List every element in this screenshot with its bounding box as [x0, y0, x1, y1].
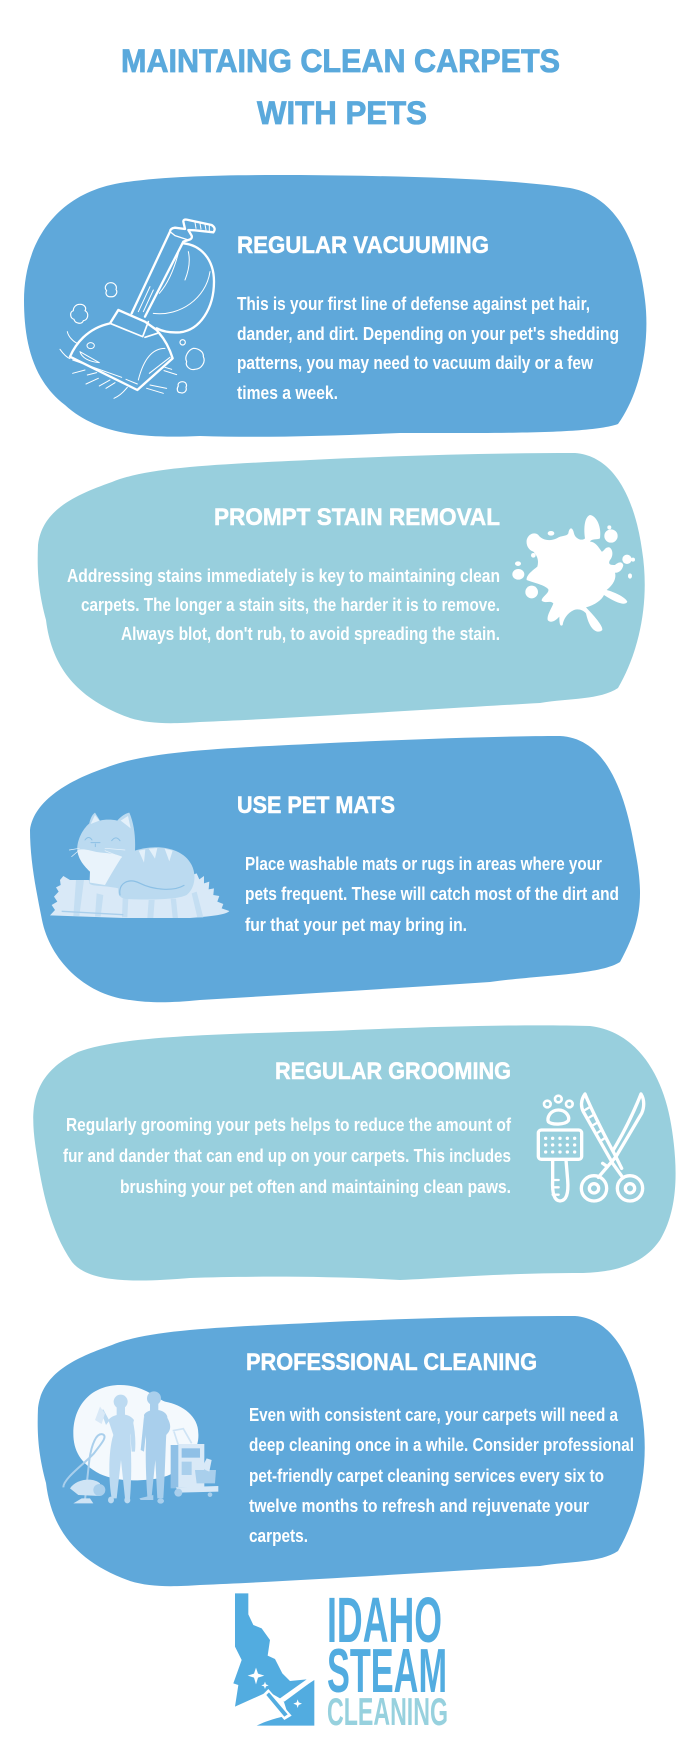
text: regular grooming body: Regularly grooming your pets helps to reduce the amount of — [66, 1115, 512, 1135]
paw — [548, 1110, 569, 1124]
text: prompt stain removal body: carpets. The longer a stain sits, the harder it is to remove. — [81, 595, 500, 615]
text: professional cleaning body — [249, 1405, 634, 1546]
heading: prompt stain removal: PROMPT STAIN REMOVAL — [214, 504, 500, 531]
scissors — [581, 1094, 623, 1177]
logo text: IDAHO — [327, 1584, 442, 1656]
panel: regular grooming — [33, 1025, 676, 1281]
text: regular vacuuming body: dander, and dirt. Depending on your pet's shedding — [237, 324, 619, 344]
icon: stain splatter — [512, 515, 635, 632]
text: regular vacuuming body: This is your first line of defense against pet hair, — [237, 294, 590, 314]
panel background: prompt stain removal — [38, 453, 645, 723]
cat chest — [77, 849, 122, 885]
title: MAINTAING CLEAN CARPETS — [121, 43, 560, 79]
woman — [95, 1395, 135, 1503]
text: regular grooming body: brushing your pet often and maintaining clean paws. — [120, 1177, 511, 1197]
panel background: regular vacuuming — [24, 175, 646, 437]
logo: Idaho Steam Cleaning: CLEANING — [327, 1691, 448, 1734]
text: use pet mats body — [245, 854, 619, 935]
vacuum head — [60, 283, 204, 398]
vacuum machine — [63, 1434, 105, 1503]
panel: prompt stain removal — [38, 453, 645, 723]
icon: grooming tools — [538, 1094, 644, 1201]
text: use pet mats body: Place washable mats or rugs in areas where your — [245, 854, 602, 874]
logo: Idaho Steam Cleaning: STEAM — [327, 1637, 447, 1706]
cat face — [85, 837, 120, 847]
title: WITH PETS — [257, 95, 427, 131]
backdrop blob — [73, 1385, 198, 1480]
vacuum upper: handle and bag — [132, 220, 215, 332]
rug — [50, 873, 229, 918]
text: regular vacuuming body: times a week. — [237, 383, 338, 403]
logo: Idaho Steam Cleaning — [233, 1584, 448, 1734]
heading: regular vacuuming: REGULAR VACUUMING — [237, 232, 489, 259]
heading: professional cleaning: PROFESSIONAL CLEANING — [246, 1349, 537, 1376]
text: use pet mats body: fur that your pet may bring in. — [245, 915, 467, 935]
brush — [538, 1130, 582, 1159]
text: use pet mats body: pets frequent. These will catch most of the dirt and — [245, 884, 619, 904]
text: regular grooming body: fur and dander that can end up on your carpets. This includes — [63, 1146, 511, 1166]
panel background: professional cleaning — [38, 1316, 645, 1586]
text: prompt stain removal body: Addressing stains immediately is key to maintaining clean — [67, 566, 500, 586]
cat ears — [91, 815, 131, 828]
cat stripes — [139, 848, 173, 863]
icon: Idaho state with squeegee — [233, 1593, 314, 1726]
title — [121, 43, 560, 131]
text: professional cleaning body: twelve months to refresh and rejuvenate your — [249, 1496, 589, 1516]
text: professional cleaning body: pet-friendly carpet cleaning services every six to — [249, 1466, 604, 1486]
text: professional cleaning body: deep cleaning once in a while. Consider professional — [249, 1435, 634, 1455]
cat body — [77, 813, 194, 900]
heading: use pet mats: USE PET MATS — [237, 792, 395, 819]
heading: regular grooming: REGULAR GROOMING — [275, 1058, 511, 1085]
text: regular vacuuming body: patterns, you may need to vacuum daily or a few — [237, 353, 594, 373]
text: professional cleaning body: carpets. — [249, 1526, 308, 1546]
text: prompt stain removal body: Always blot, don't rub, to avoid spreading the stain. — [121, 624, 500, 644]
man — [139, 1391, 170, 1504]
text: regular vacuuming body — [237, 294, 619, 403]
text: regular grooming body — [63, 1115, 512, 1197]
icon: vacuum cleaner — [60, 220, 215, 398]
panel: professional cleaning — [38, 1316, 645, 1586]
panel: regular vacuuming — [24, 175, 646, 437]
panel background: use pet mats — [30, 736, 640, 1002]
panel background: regular grooming — [33, 1025, 676, 1281]
icon: cat on rug — [50, 813, 229, 918]
cleaning cart — [171, 1429, 218, 1497]
text: professional cleaning body: Even with consistent care, your carpets will need a — [249, 1405, 619, 1425]
text: prompt stain removal body — [67, 566, 500, 644]
illustration: cleaning team — [63, 1385, 218, 1504]
panel: use pet mats — [30, 736, 640, 1002]
